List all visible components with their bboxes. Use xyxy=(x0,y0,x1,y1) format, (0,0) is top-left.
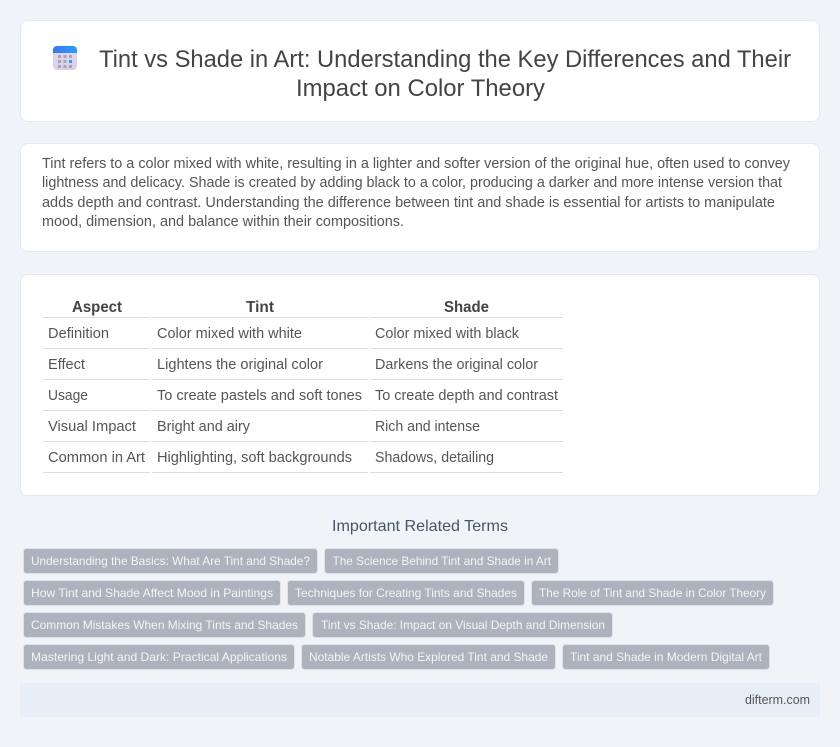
tag xyxy=(562,644,770,670)
tag xyxy=(288,580,524,606)
table header: Tint xyxy=(246,299,275,316)
table row: usage: To create depth and contrast xyxy=(375,388,558,404)
tag: How Tint and Shade Affect Mood in Paintings xyxy=(31,586,273,600)
table header: Shade xyxy=(444,299,489,316)
tag: Mastering Light and Dark: Practical Applications xyxy=(31,650,287,664)
panel: header xyxy=(20,20,820,122)
table header xyxy=(72,299,489,316)
tag xyxy=(24,644,294,670)
tag: The Role of Tint and Shade in Color Theory xyxy=(539,586,766,600)
table row: visual impact: Rich and intense xyxy=(375,419,480,435)
text block: description: mood, dimension, and balance within their compositions. xyxy=(42,214,404,230)
icon: calendar xyxy=(53,46,77,70)
title xyxy=(99,46,791,102)
panel: comparison table xyxy=(20,274,820,496)
text block: description xyxy=(42,156,791,230)
footer xyxy=(20,683,820,717)
table row: definition: Definition xyxy=(48,326,109,342)
tag: The Science Behind Tint and Shade in Art xyxy=(332,554,552,568)
table header: Aspect xyxy=(72,299,123,316)
table row: common in art: Highlighting, soft backgrounds xyxy=(157,450,352,466)
tag xyxy=(324,548,558,574)
footer: difterm.com xyxy=(745,692,810,707)
table row: visual impact: Visual Impact xyxy=(48,419,136,435)
text block: description: adds depth and contrast. Understanding the difference between tint and shade is essential for artists to manipulate xyxy=(42,195,775,211)
tag xyxy=(302,644,556,670)
title: Tint vs Shade in Art: Understanding the Key Differences and Their xyxy=(99,46,791,73)
table row: definition xyxy=(48,326,520,342)
table row: common in art xyxy=(48,450,494,466)
tag xyxy=(532,580,774,606)
table row: usage xyxy=(48,388,558,404)
table row: common in art: Shadows, detailing xyxy=(375,450,494,466)
table row: visual impact: Bright and airy xyxy=(157,419,251,435)
tag: Common Mistakes When Mixing Tints and Shades xyxy=(31,618,298,632)
table row: effect: Effect xyxy=(48,357,85,373)
tag: Notable Artists Who Explored Tint and Shade xyxy=(309,650,548,664)
tag: Tint vs Shade: Impact on Visual Depth and Dimension xyxy=(321,618,605,632)
table row: effect: Lightens the original color xyxy=(157,357,323,373)
table row: common in art: Common in Art xyxy=(48,450,145,466)
panel: intro text xyxy=(20,144,820,252)
tag xyxy=(312,612,612,638)
tag: Tint and Shade in Modern Digital Art xyxy=(570,650,763,664)
table row: visual impact xyxy=(48,419,480,435)
tag: Techniques for Creating Tints and Shades xyxy=(295,586,517,600)
tag xyxy=(24,548,318,574)
tag xyxy=(24,612,306,638)
table row: definition: Color mixed with black xyxy=(375,326,520,342)
tag: Understanding the Basics: What Are Tint and Shade? xyxy=(31,554,310,568)
text block: description: Tint refers to a color mixed with white, resulting in a lighter and softer version of the original hue, often used to convey xyxy=(42,156,791,172)
table row: usage: To create pastels and soft tones xyxy=(157,388,362,404)
table row: effect xyxy=(48,357,538,373)
table row: usage: Usage xyxy=(48,388,88,404)
related terms tags xyxy=(24,548,774,670)
text block: description: lightness and delicacy. Shade is created by adding black to a color, producing a darker and more intense version that xyxy=(42,175,782,191)
tag xyxy=(24,580,280,606)
table row: effect: Darkens the original color xyxy=(375,357,538,373)
table row: definition: Color mixed with white xyxy=(157,326,302,342)
title: Impact on Color Theory xyxy=(296,75,545,102)
heading: related terms: Important Related Terms xyxy=(332,518,508,535)
